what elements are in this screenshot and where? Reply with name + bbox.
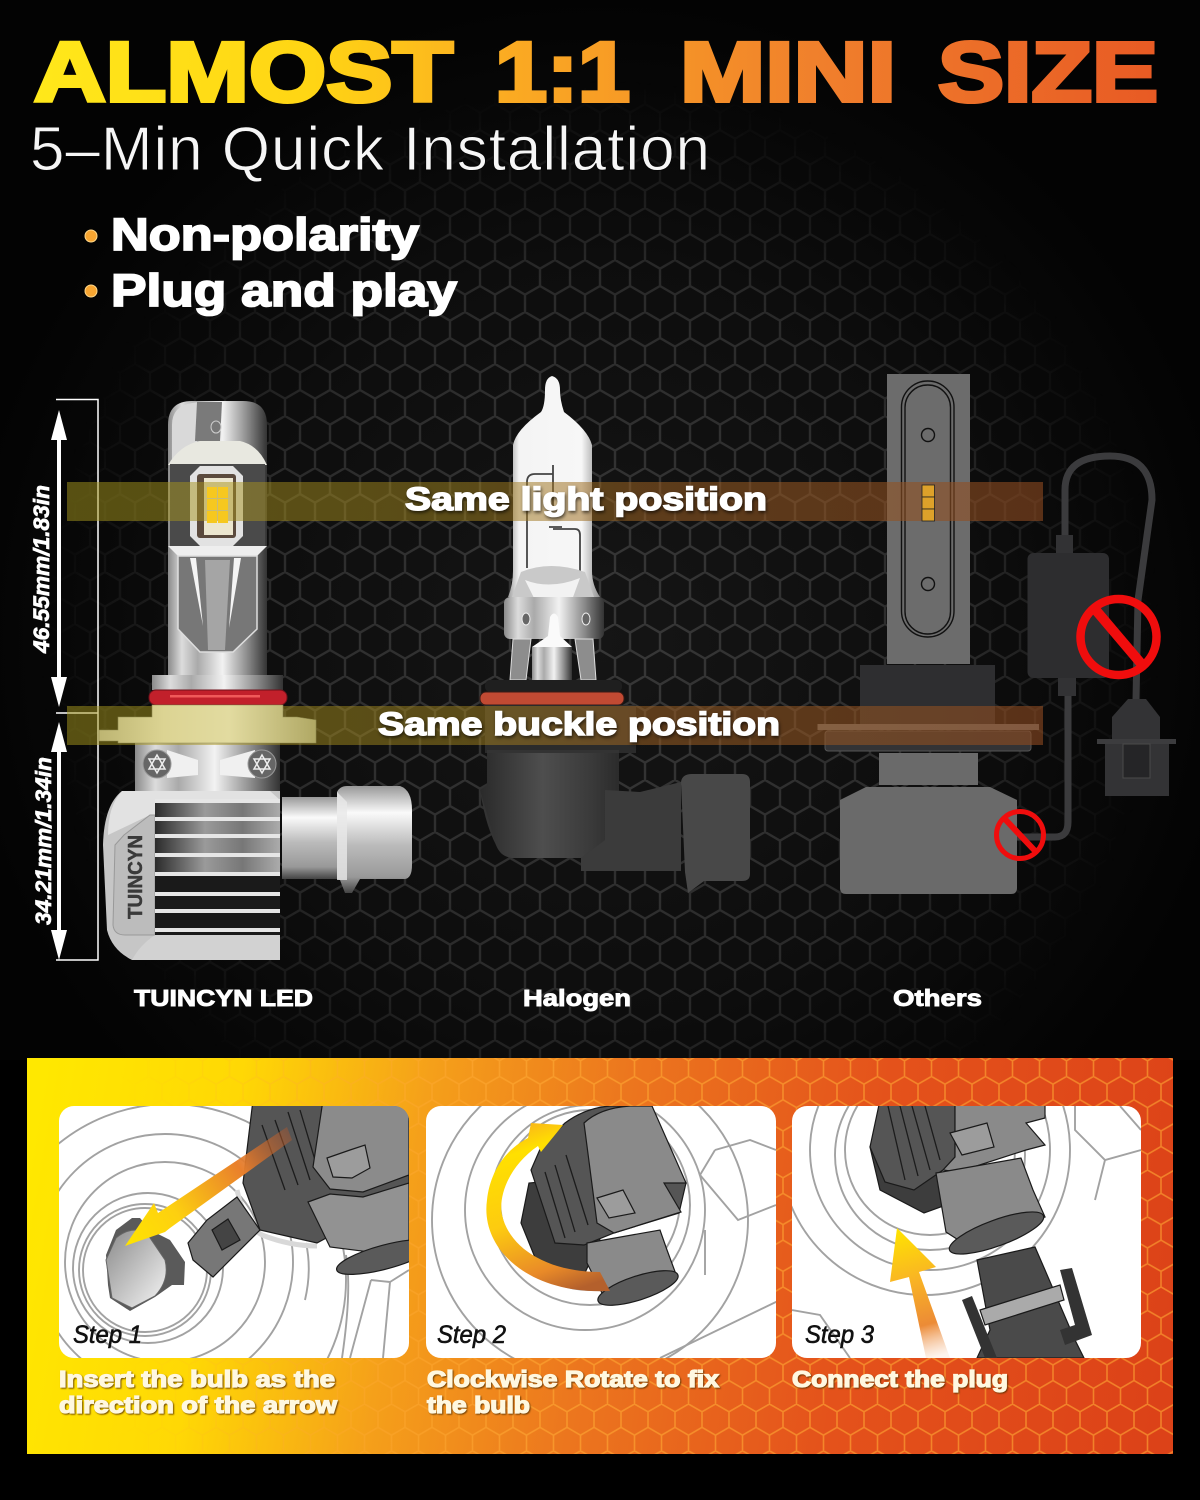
bullet: plug and play: Plug and play	[111, 265, 457, 316]
mating plug illustration	[962, 1247, 1092, 1358]
arrow: connect	[890, 1228, 950, 1358]
connector illustration	[870, 1100, 1048, 1262]
dimension: lower length: 34.21mm/1.34in	[31, 757, 56, 925]
caption: step 3: Connect the plug	[792, 1366, 1008, 1392]
halogen socket	[480, 750, 750, 893]
TUINCYN LED bulb	[103, 401, 412, 960]
socket hole	[106, 1218, 185, 1311]
connector illustration	[187, 1106, 409, 1278]
arrow: insert	[125, 1127, 292, 1246]
brand mark: TUINCYN	[125, 835, 147, 919]
gold mounting flange	[99, 705, 316, 743]
title: SIZE	[938, 25, 1158, 119]
dimension bracket	[51, 400, 98, 960]
bullet: non-polarity: Non-polarity	[111, 209, 419, 260]
label: Halogen: Halogen	[523, 985, 631, 1011]
title: 1:1	[495, 25, 630, 119]
step 2 tag: Step 2	[437, 1321, 506, 1349]
caption: step 2: the bulb	[427, 1392, 530, 1418]
screws	[143, 750, 276, 778]
title	[34, 25, 1158, 119]
dark honeycomb background	[52, 94, 1148, 1058]
LED chip	[207, 487, 228, 523]
step 3 card	[792, 1106, 1141, 1358]
caption: step 2	[427, 1366, 719, 1418]
alignment band: light position	[67, 481, 1043, 523]
step 1 tag: Step 1	[73, 1321, 142, 1349]
caption: step 1: direction of the arrow	[59, 1392, 337, 1418]
step 2 card	[426, 1106, 776, 1358]
panel: installation steps	[27, 1058, 1173, 1454]
title: MINI	[680, 25, 896, 119]
dimension: upper length: 46.55mm/1.83in	[29, 485, 54, 654]
caption: step 1	[59, 1366, 337, 1418]
step 3 tag: Step 3	[805, 1321, 874, 1349]
feature bullets	[85, 209, 457, 316]
alignment band: light position: Same light position	[405, 481, 767, 517]
label: TUINCYN LED: TUINCYN LED	[134, 985, 313, 1011]
label: Others: Others	[893, 985, 982, 1011]
connector illustration	[521, 1106, 686, 1312]
alignment band: buckle position: Same buckle position	[378, 706, 780, 742]
caption: step 1: Insert the bulb as the	[59, 1366, 335, 1392]
external driver and cable	[1017, 456, 1176, 837]
icon: prohibited cable	[996, 812, 1044, 858]
heatsink fins	[155, 799, 280, 932]
others bulb	[818, 374, 1039, 894]
alignment band: buckle position	[67, 705, 1043, 745]
step 1 card	[59, 1106, 409, 1358]
subtitle: 5–Min Quick Installation	[30, 115, 710, 184]
halogen bulb	[480, 376, 750, 893]
caption: step 2: Clockwise Rotate to fix	[427, 1366, 719, 1392]
icon: prohibited driver	[1080, 599, 1156, 675]
title: ALMOST	[34, 25, 453, 119]
others LED chip	[922, 485, 934, 521]
arrow: clockwise	[486, 1123, 610, 1291]
